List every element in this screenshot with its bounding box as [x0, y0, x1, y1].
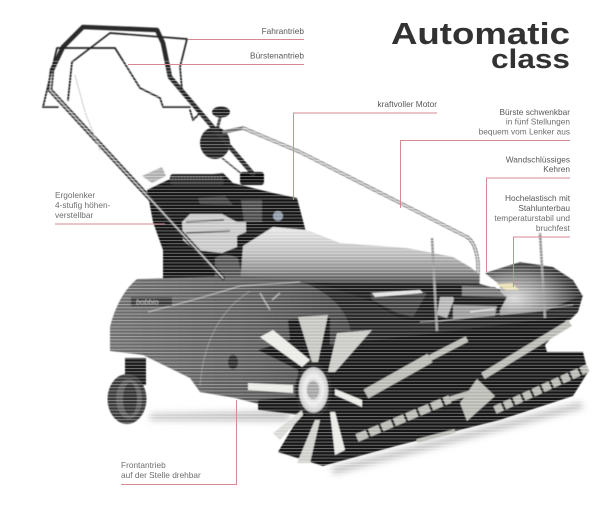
callout: Fahrantrieb — [188, 26, 304, 40]
callout: Bürstenantrieb: Bürstenantrieb — [250, 50, 304, 60]
brand plate — [131, 297, 172, 306]
callout: Bürste schwenkbar: Bürste schwenkbar — [499, 107, 570, 117]
front wheel — [108, 358, 146, 424]
callout: Fahrantrieb: Fahrantrieb — [262, 26, 304, 36]
tray rim — [300, 281, 583, 345]
callout: Frontantrieb: auf der Stelle drehbar — [121, 470, 201, 480]
roller brush body — [258, 316, 588, 466]
callout: Hochelastisch mit Stahlunterbau: Stahlunterbau — [518, 203, 570, 213]
sweeper machine illustration — [43, 27, 588, 474]
callout: Hochelastisch mit Stahlunterbau: temperaturstabil und — [494, 213, 570, 223]
callout: Wandschlüssiges Kehren: Kehren — [543, 164, 570, 174]
vertical support rods — [432, 233, 545, 331]
callout: Bürste schwenkbar: in fünf Stellungen — [506, 116, 570, 126]
callout: Ergolenker — [55, 190, 165, 224]
callout: Bürste schwenkbar: bequem vom Lenker aus — [479, 126, 570, 136]
radial brush tufts — [248, 315, 372, 463]
callout: Wandschlüssiges Kehren — [486, 154, 570, 272]
brand plate: bobbio — [136, 298, 159, 306]
engine — [142, 167, 306, 285]
callout: Hochelastisch mit Stahlunterbau: Hochelastisch mit — [505, 193, 571, 203]
callout: Ergolenker: 4-stufig höhen- — [55, 200, 111, 210]
bristle tufts — [357, 323, 588, 441]
brush hub — [295, 363, 332, 417]
handlebar — [43, 27, 253, 278]
right tray — [485, 262, 582, 318]
callout: Bürste schwenkbar — [400, 107, 570, 208]
callout: Frontantrieb — [121, 400, 236, 484]
callout: Wandschlüssiges Kehren: Wandschlüssiges — [506, 154, 570, 164]
left housing — [110, 276, 352, 420]
callout: Hochelastisch mit Stahlunterbau: bruchfest — [536, 223, 571, 233]
title: Automatic — [391, 16, 570, 51]
callout: Ergolenker: Ergolenker — [55, 190, 95, 200]
title — [391, 16, 570, 74]
silver hood — [240, 227, 479, 286]
callout: kraftvoller Motor — [294, 99, 437, 200]
inner wedge — [370, 290, 427, 317]
title: class — [491, 44, 570, 74]
bristle clump — [460, 379, 495, 421]
long silver rod — [224, 128, 478, 320]
callout: Ergolenker: verstellbar — [55, 210, 94, 220]
callout: Frontantrieb: Frontantrieb — [121, 460, 166, 470]
dark centre section — [238, 282, 520, 324]
axle cap — [228, 354, 238, 370]
callout: kraftvoller Motor: kraftvoller Motor — [378, 99, 437, 109]
ground shadow — [150, 402, 584, 474]
adjustment knob and disc — [200, 106, 243, 175]
callout: Hochelastisch mit Stahlunterbau — [494, 193, 571, 287]
metal mechanism — [437, 286, 507, 320]
